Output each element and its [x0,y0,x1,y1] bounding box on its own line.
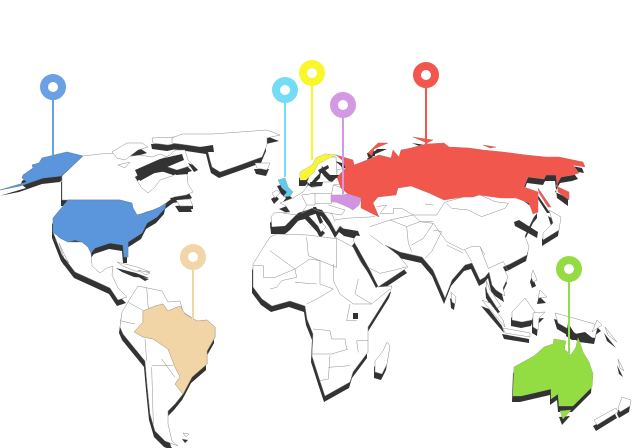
country borders: Europe [283,183,375,222]
Lake Victoria [353,313,358,319]
country borders: Asia [370,193,508,273]
country: Brazil [134,304,215,394]
country: USA and Alaska [0,152,166,257]
pin: Australia [560,260,578,353]
pin: Ukraine [334,96,352,194]
pin: USA [44,78,62,155]
inner shadows over land [135,145,595,342]
country: Australia [513,337,593,419]
country: United Kingdom [278,178,293,197]
country borders: Africa and South America [120,237,390,424]
pin: United Kingdom [276,81,294,177]
map drop shadow [0,136,630,448]
continents [0,130,631,446]
country: Ukraine [331,194,361,210]
pin: Norway [303,64,321,160]
country: Norway [300,154,337,180]
pin: Russia [417,66,435,144]
pin: Brazil [184,248,202,319]
country: Russia [336,137,585,217]
